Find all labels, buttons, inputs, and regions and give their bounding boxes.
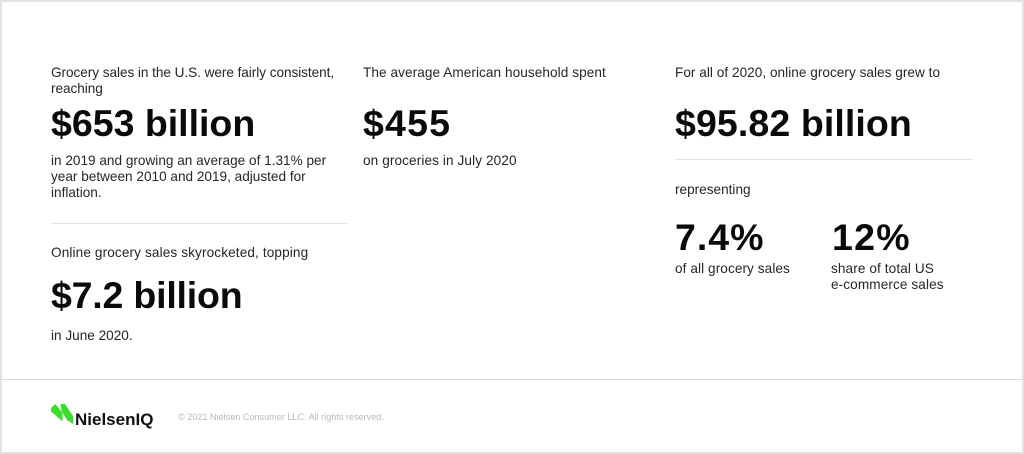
text: grocery sales intro xyxy=(51,65,334,96)
text: 2019 growth detail: in 2019 and growing an average of 1.31% per xyxy=(51,153,326,168)
panel: column 2 stat xyxy=(363,65,606,168)
text: representing: representing xyxy=(675,182,751,197)
icon: NielsenIQ logo mark xyxy=(51,404,73,424)
text: grocery sales intro: reaching xyxy=(51,81,103,96)
text: grocery sales intro: Grocery sales in the U.S. were fairly consistent, xyxy=(51,65,334,80)
text: June 2020: in June 2020. xyxy=(51,328,133,343)
logo wordmark: NielsenIQ xyxy=(75,410,153,429)
text: 2019 growth detail xyxy=(51,153,326,200)
text: 2019 growth detail: inflation. xyxy=(51,185,102,200)
text: online sales intro: Online grocery sales skyrocketed, topping xyxy=(51,245,308,260)
text: share of e-commerce xyxy=(831,261,944,292)
stat: 12%: 12% xyxy=(832,216,911,258)
footer xyxy=(51,404,384,429)
panel: column 3 stats xyxy=(675,65,973,292)
text: household spend intro: The average American household spent xyxy=(363,65,606,80)
stat: $7.2 billion: $7.2 billion xyxy=(51,274,242,316)
panel: column 1 bottom stat xyxy=(51,245,308,343)
text: 2019 growth detail: year between 2010 and 2019, adjusted for xyxy=(51,169,306,184)
stat: $95.82 billion: $95.82 billion xyxy=(675,102,912,144)
stat: $653 billion: $653 billion xyxy=(51,102,255,144)
text: July 2020: on groceries in July 2020 xyxy=(363,153,517,168)
stat: $455: $455 xyxy=(363,102,451,144)
text: share of e-commerce: share of total US xyxy=(831,261,934,276)
text: share of e-commerce: e-commerce sales xyxy=(831,277,944,292)
text: of all grocery sales: of all grocery sales xyxy=(675,261,790,276)
panel: column 1 top stat xyxy=(51,65,334,200)
copyright: © 2021 Nielsen Consumer LLC. All rights reserved. xyxy=(178,412,384,422)
text: 2020 online intro: For all of 2020, online grocery sales grew to xyxy=(675,65,940,80)
stat: 7.4%: 7.4% xyxy=(675,216,764,258)
